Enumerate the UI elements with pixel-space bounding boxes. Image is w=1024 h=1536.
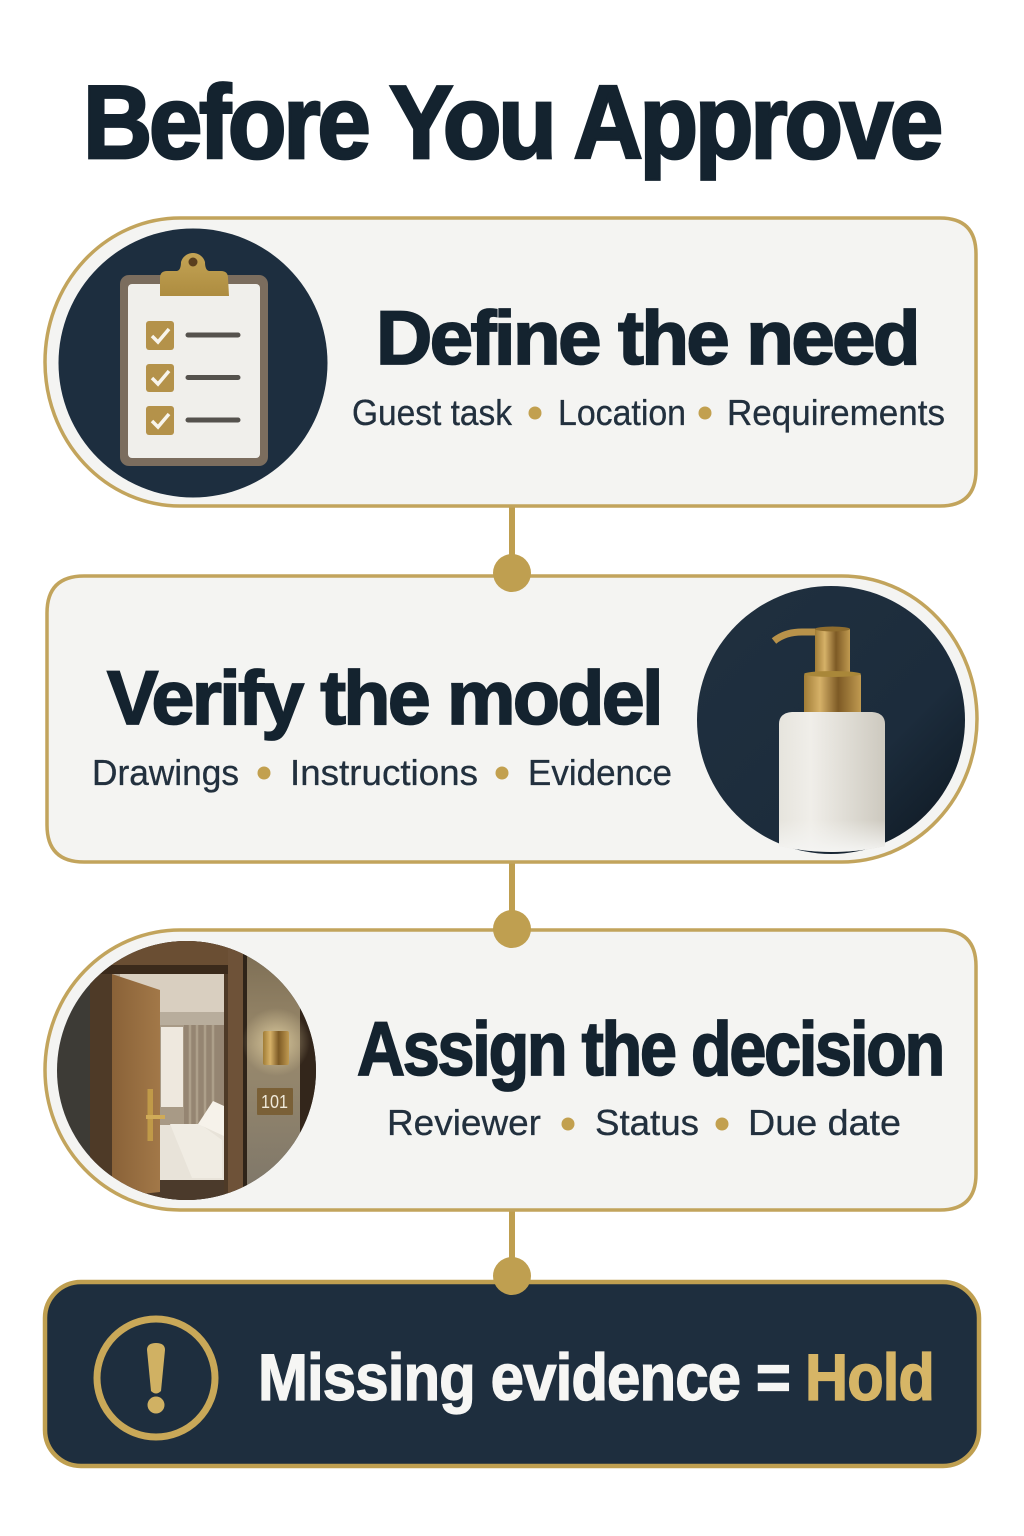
icon: soap dispenser bottle: [697, 586, 965, 854]
panel: define the need: [45, 218, 976, 506]
panel: alert missing evidence: [45, 1282, 979, 1466]
checklist items: Evidence: [528, 752, 672, 793]
title: Before You Approve: [83, 65, 941, 181]
connector node 1: [493, 554, 531, 592]
checklist items: Status: [595, 1102, 699, 1143]
panel: assign the decision: [45, 930, 976, 1210]
connector node 3: [493, 1257, 531, 1295]
checklist items: Reviewer: [387, 1102, 541, 1143]
heading: Define the need: [376, 296, 918, 381]
connector: step 2 to step 3: [509, 861, 515, 931]
checklist items: Drawings: [92, 752, 239, 793]
checklist items: [352, 392, 945, 433]
alert message: Missing evidence =: [258, 1340, 790, 1414]
checklist items: Due date: [748, 1102, 901, 1143]
icon: clipboard checklist: [58, 228, 328, 498]
checklist items: [92, 752, 672, 793]
connector: step 3 to alert: [509, 1209, 515, 1279]
checklist items: Requirements: [727, 392, 945, 433]
panel: verify the model: [47, 576, 977, 862]
checklist items: Instructions: [290, 752, 478, 793]
checklist items: Guest task: [352, 392, 513, 433]
checklist items: Location: [558, 392, 686, 433]
heading: Verify the model: [107, 656, 661, 741]
illustration: hotel room door: [57, 941, 316, 1200]
connector node 2: [493, 910, 531, 948]
icon: exclamation in circle: [97, 1319, 215, 1437]
checklist items: [387, 1102, 901, 1143]
heading: Assign the decision: [357, 1007, 943, 1092]
illustration: hotel room door: 101: [261, 1092, 288, 1112]
alert message: Hold: [805, 1340, 934, 1414]
connector: step 1 to step 2: [509, 505, 515, 575]
